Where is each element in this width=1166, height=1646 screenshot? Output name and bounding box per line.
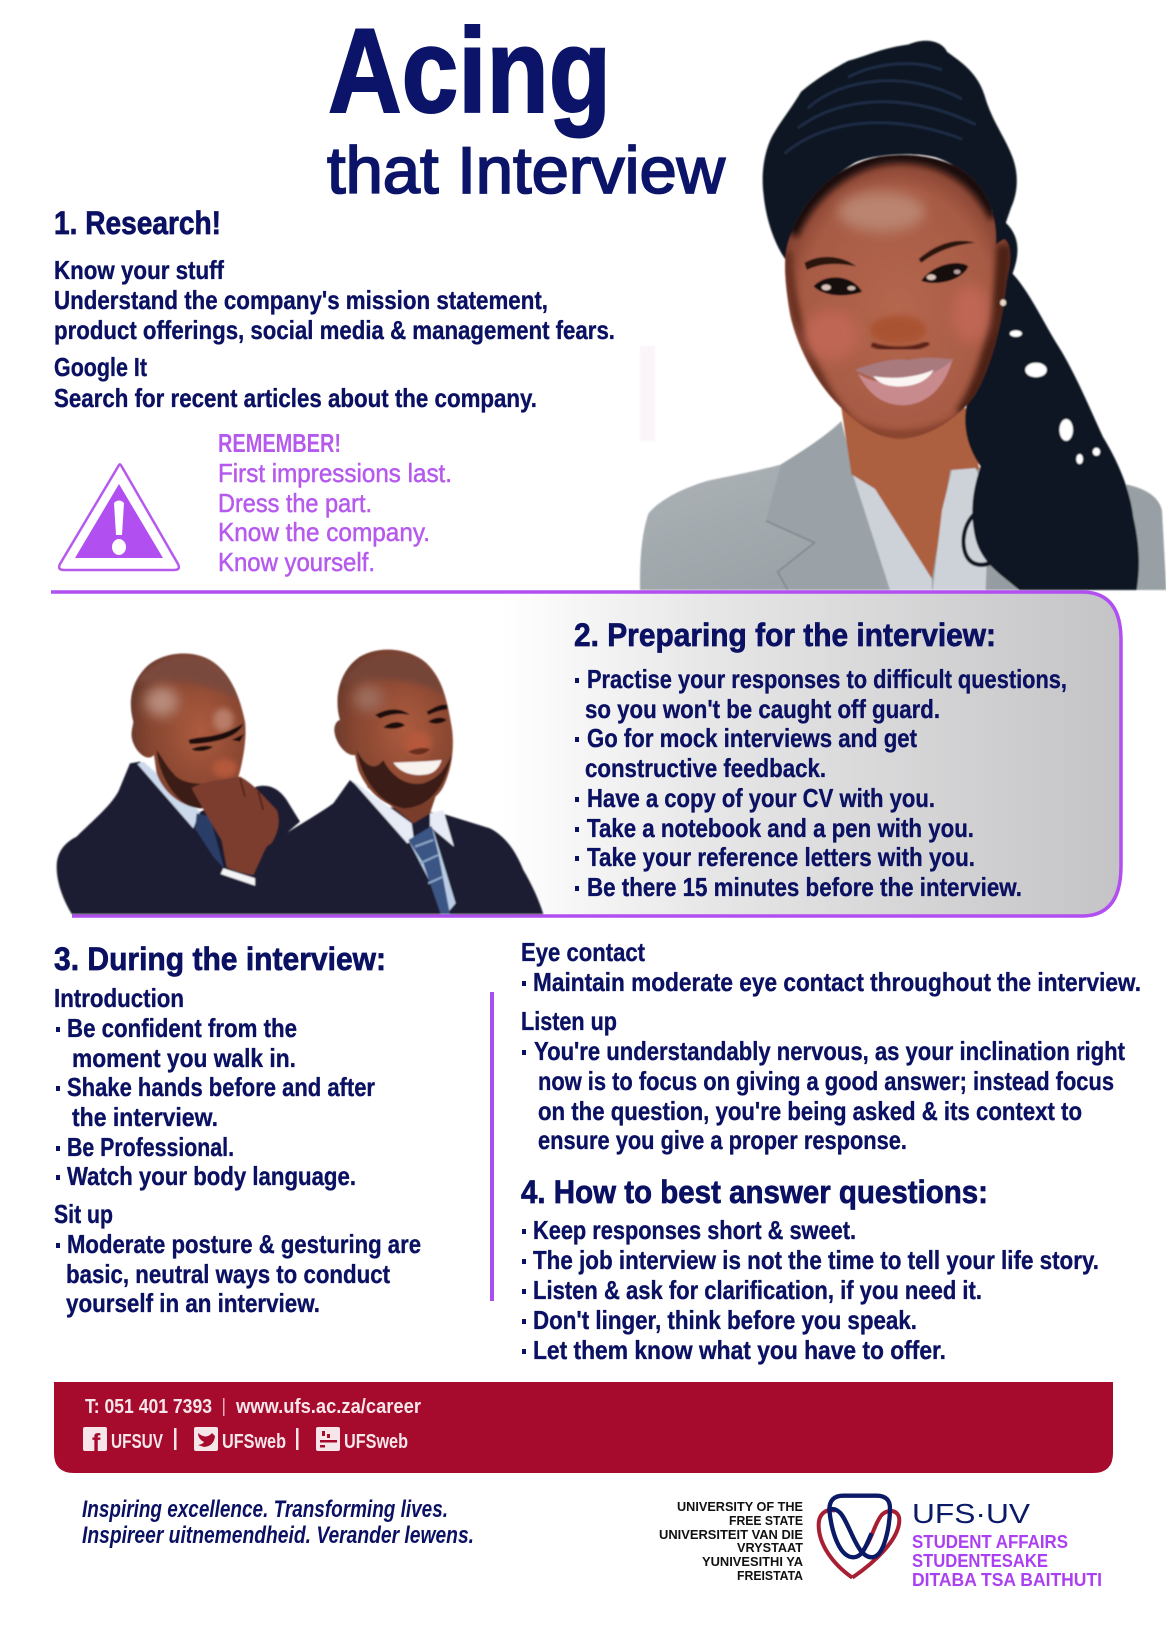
subsection: know your stuff: product offerings, social media & management fears.: [54, 315, 615, 345]
section 3 continued: [521, 937, 1141, 1155]
subsection: eye contact: Eye contact: [521, 937, 645, 967]
heading: during: 3. During the interview:: [54, 941, 386, 977]
callout: remember: Dress the part.: [218, 488, 372, 518]
university name: FREISTATA: [737, 1569, 803, 1583]
heading: answering: 4. How to best answer questions:: [521, 1174, 988, 1210]
contact details: T: 051 401 7393: [85, 1396, 212, 1418]
subsection: introduction: Shake hands before and after: [67, 1072, 375, 1102]
section 3: during the interview: [54, 941, 421, 1318]
social: instagram handle: UFSweb: [344, 1431, 408, 1453]
department names: DITABA TSA BAITHUTI: [912, 1570, 1102, 1590]
icon: facebook: [83, 1427, 107, 1457]
list: preparation tips: Practise your responses to difficult questions,: [587, 664, 1067, 694]
list: answering tips: Let them know what you have to offer.: [533, 1335, 946, 1365]
callout: remember: [218, 428, 452, 577]
subsection: listen up: Listen up: [521, 1006, 617, 1036]
list: preparation tips: Take your reference letters with you.: [587, 842, 975, 872]
list: answering tips: Don't linger, think before you speak.: [533, 1305, 917, 1335]
section 4: how to best answer questions: [521, 1174, 1099, 1365]
title line: Acing: Acing: [328, 4, 611, 138]
list: preparation tips: Be there 15 minutes before the interview.: [587, 872, 1022, 902]
list: preparation tips: Have a copy of your CV with you.: [587, 783, 935, 813]
subsection: listen up: [521, 1006, 1125, 1155]
panel: preparing for the interview: [51, 592, 1121, 916]
subsection: introduction: moment you walk in.: [72, 1043, 296, 1073]
section 1: research: [54, 205, 615, 413]
section 2 text: [574, 617, 1067, 902]
icon: facebook: f: [92, 1429, 101, 1457]
photo: smiling woman in grey jacket: [640, 41, 1166, 590]
subsection: introduction: Introduction: [54, 983, 184, 1013]
department names: STUDENTESAKE: [912, 1551, 1048, 1571]
list: answering tips: Listen & ask for clarification, if you need it.: [533, 1275, 982, 1305]
column divider: [490, 992, 494, 1301]
subsection: google it: Search for recent articles about the company.: [54, 383, 537, 413]
subsection: introduction: Watch your body language.: [67, 1161, 356, 1191]
icon: twitter: [194, 1427, 218, 1451]
contact bar: www.ufs.ac.za/career: [235, 1396, 421, 1418]
subsection: introduction: Be confident from the: [67, 1013, 297, 1043]
subsection: listen up: on the question, you're being asked & its context to: [538, 1096, 1082, 1126]
list: preparation tips: Take a notebook and a pen with you.: [587, 813, 974, 843]
list: preparation tips: Go for mock interviews and get: [587, 723, 917, 753]
subsection: know your stuff: Understand the company's mission statement,: [54, 285, 548, 315]
photo: two men in suits: [57, 650, 543, 914]
icon: warning triangle: [59, 464, 179, 570]
callout: remember: First impressions last.: [218, 458, 452, 488]
heading: research: 1. Research!: [54, 205, 221, 241]
callout: remember: Know the company.: [218, 517, 430, 547]
subsection: sit up: yourself in an interview.: [66, 1288, 320, 1318]
list: answering tips: [522, 1215, 1099, 1365]
title: [327, 4, 725, 207]
department names: [912, 1532, 1102, 1590]
subsection: google it: Google It: [54, 352, 147, 382]
university name: UNIVERSITY OF THE: [677, 1500, 803, 1514]
list: answering tips: Keep responses short & sweet.: [533, 1215, 856, 1245]
university name: VRYSTAAT: [737, 1541, 803, 1555]
tagline: [82, 1496, 474, 1549]
subsection: know your stuff: [54, 255, 615, 345]
subsection: sit up: Moderate posture & gesturing are: [67, 1229, 421, 1259]
list: preparation tips: so you won't be caught off guard.: [585, 694, 940, 724]
subsection: sit up: [54, 1199, 421, 1318]
subsection: sit up: basic, neutral ways to conduct: [66, 1259, 390, 1289]
icon: calendar: [316, 1427, 340, 1451]
subsection: introduction: [54, 983, 375, 1191]
subsection: introduction: Be Professional.: [67, 1132, 234, 1162]
subsection: google it: [54, 352, 537, 413]
social: twitter handle: UFSweb: [222, 1431, 286, 1453]
university name: YUNIVESITHI YA: [702, 1555, 803, 1569]
tagline: Inspiring excellence. Transforming lives.: [82, 1496, 448, 1523]
department names: STUDENT AFFAIRS: [912, 1532, 1068, 1552]
heading: preparing: 2. Preparing for the interview:: [574, 617, 996, 653]
subsection: introduction: the interview.: [72, 1102, 218, 1132]
subsection: eye contact: [521, 937, 1141, 997]
contact bar: [54, 1382, 1113, 1473]
university name: FREE STATE: [729, 1514, 803, 1528]
tagline: Inspireer uitnemendheid. Verander lewens.: [82, 1522, 474, 1549]
list: preparation tips: [575, 664, 1067, 902]
logo: UFS-UV wordmark: UFS·UV: [912, 1498, 1030, 1529]
callout: remember: Know yourself.: [218, 547, 375, 577]
social: facebook handle: UFSUV: [111, 1431, 163, 1453]
list: preparation tips: constructive feedback.: [585, 753, 826, 783]
university name: [659, 1500, 803, 1583]
callout: remember: REMEMBER!: [218, 428, 341, 458]
logo: UFS heart emblem: [819, 1496, 899, 1578]
subsection: know your stuff: Know your stuff: [54, 255, 224, 285]
subsection: listen up: ensure you give a proper response.: [538, 1125, 907, 1155]
subsection: sit up: Sit up: [54, 1199, 113, 1229]
university name: UNIVERSITEIT VAN DIE: [659, 1528, 803, 1542]
title line: that Interview: that Interview: [327, 133, 725, 207]
